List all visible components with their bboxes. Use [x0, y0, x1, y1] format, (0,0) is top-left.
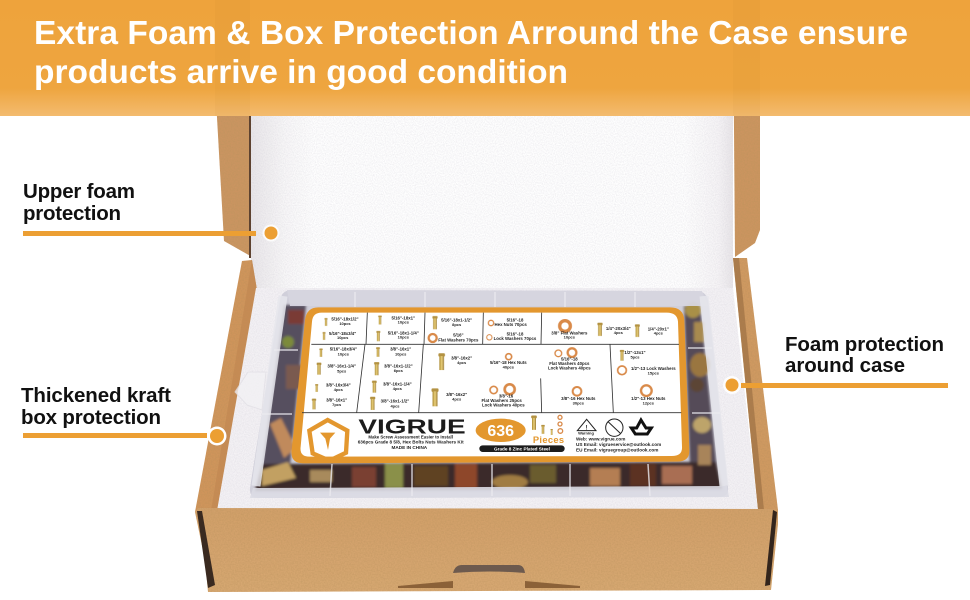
left corner shadow [197, 511, 215, 588]
size captions: 10pcs [398, 319, 410, 324]
size captions: 10pcs [338, 352, 350, 357]
size captions: 3/8"-16x1-1/2" [384, 363, 413, 368]
size captions: 10pcs [398, 335, 410, 340]
size captions: Flat Washers 25pcs [482, 398, 522, 403]
brand block: 636pcs Grade 8 5/8, Hex Bolts Nuts Washers Kit [358, 440, 464, 445]
callout: upper foam protection: Upper foam [23, 180, 135, 203]
logo hexagon [309, 420, 347, 461]
warning and contact block: Warning [578, 431, 594, 436]
size captions: 3/8"-16x1" [390, 347, 411, 352]
size captions: 3/8" Flat Washers [551, 331, 588, 336]
size captions: Flat Washers 40pcs [549, 361, 590, 366]
lid flaps ghosted through the band [215, 0, 760, 116]
front cardboard flap [195, 508, 778, 592]
warning and contact block: Web: www.vigrue.com [576, 437, 625, 442]
636 pieces badge: Pieces [533, 435, 564, 445]
size captions: 5/16" [453, 333, 464, 338]
size captions: 4pcs [654, 331, 664, 336]
size captions: 5/16"-18x1/2" [331, 317, 359, 322]
size captions: 15pcs [648, 371, 660, 376]
callout: upper foam protection: protection [23, 202, 121, 225]
right lid flap [733, 0, 760, 257]
upper lid flaps and foam [215, 0, 760, 288]
size captions: 1/4"-20x3/4" [606, 326, 631, 331]
size captions: 8pcs [452, 322, 462, 327]
upper foam pad [251, 0, 733, 288]
warning and contact block: ! [586, 425, 588, 431]
size captions: 4pcs [457, 360, 467, 365]
size captions: 3/8"-16x1" [326, 397, 347, 402]
size captions: 4pcs [614, 330, 624, 335]
callout: foam protection around case: around case [785, 354, 905, 377]
636 pieces badge [476, 415, 565, 452]
size captions: 5/16"-18x3/4" [330, 347, 357, 352]
brand block [309, 415, 466, 461]
right wall [733, 258, 778, 510]
title: Extra Foam & Box Protection Arround the Case ensure [34, 15, 908, 52]
size captions: Lock Washers 40pcs [482, 402, 525, 407]
translucent rim [287, 290, 708, 306]
size captions: 1/2"-13 Lock Washers [631, 366, 676, 371]
size captions: 3/8"-16x1-1/2" [381, 399, 409, 404]
size captions: 5/16"-18x3/4" [329, 331, 356, 336]
locking tab [453, 565, 525, 590]
size captions: 1/2"-13x1" [624, 350, 646, 355]
hinge clip [235, 372, 266, 410]
size captions: 30pcs [573, 401, 585, 406]
callout: foam protection around case: Foam protection [785, 333, 944, 356]
bottom foam tray [217, 288, 758, 511]
size captions: 4pcs [393, 386, 403, 391]
cardboard box side walls [195, 258, 778, 512]
size captions: 5pcs [337, 368, 347, 373]
size captions: 5/16"-18 [561, 357, 578, 362]
size captions: 1/2"-13 Hex Nuts [631, 396, 666, 401]
size captions: Lock Washers 70pcs [494, 336, 537, 341]
size captions: Flat Washers 70pcs [438, 337, 479, 342]
size captions: 10pcs [339, 321, 351, 326]
left lid flap [215, 0, 254, 258]
636 pieces badge: Grade 8 Zinc Plated Steel [494, 446, 550, 451]
brand block: Make Screw Assessment Easier to Install [368, 434, 453, 439]
size captions: 3/8"-16 [499, 393, 514, 398]
size captions: 3/8"-16x1-1/4" [383, 381, 412, 386]
label border [291, 307, 689, 463]
clear plastic case with hardware [235, 290, 729, 498]
grid lines [302, 313, 681, 413]
size captions: 5/16"-18x1" [392, 315, 415, 320]
locking tab slot [398, 581, 580, 588]
size captions: 6pcs [394, 368, 404, 373]
callout: thickened kraft box protection: Thickened kraft [21, 384, 171, 407]
size captions: 5/16"-18x1-1/4" [388, 331, 419, 336]
title [34, 15, 908, 91]
size captions: 12pcs [643, 401, 655, 406]
callout: thickened kraft box protection: box protection [21, 406, 161, 429]
size captions: 3/8"-16x2" [446, 392, 467, 397]
title: products arrive in good condition [34, 54, 568, 91]
brand name: VIGRUE [358, 415, 466, 438]
size captions: 10pcs [337, 335, 349, 340]
size captions: 40pcs [503, 365, 515, 370]
orange header band [0, 0, 970, 116]
size captions: 4pcs [334, 387, 344, 392]
size captions: 5/16"-18 [507, 317, 524, 322]
size captions: 4pcs [390, 403, 400, 408]
size captions: 5pcs [630, 355, 640, 360]
size captions: 3/8"-16x2" [451, 355, 472, 360]
size captions: 5/16"-18 Hex Nuts [490, 360, 527, 365]
size captions: 4pcs [452, 397, 462, 402]
size captions: 1/4"-20x1" [648, 327, 669, 332]
size captions: 3/8"-16x1-1/4" [327, 364, 356, 369]
warning and contact block [576, 419, 661, 452]
callout: upper foam protection [23, 180, 280, 242]
636 pieces badge: 636 [487, 423, 514, 440]
callout: foam protection around case [723, 333, 948, 394]
size captions: Hex Nuts 70pcs [495, 322, 527, 327]
label white panel [301, 313, 682, 457]
callout: thickened kraft box protection [21, 384, 226, 446]
size captions: 10pcs [395, 352, 407, 357]
right corner shadow [765, 510, 777, 586]
hardware visible in the compartments [255, 302, 722, 491]
product label [291, 307, 689, 463]
warning and contact block: EU Email: vigruegroup@outlook.com [576, 447, 658, 452]
size captions: 3/8"-16 Hex Nuts [561, 396, 596, 401]
size captions: 3/8"-16x3/4" [326, 382, 351, 387]
warning and contact block: US Email: vigrueservice@outlook.com [576, 442, 661, 447]
brand block: MADE IN CHINA [391, 445, 428, 450]
size captions: Lock Washers 40pcs [548, 365, 591, 370]
size captions: 7pcs [332, 402, 342, 407]
size captions: 5/16"-18x1-1/2" [441, 317, 472, 322]
bolt and washer pictograms [312, 315, 652, 410]
size captions: 10pcs [564, 335, 576, 340]
size captions [326, 315, 676, 408]
size captions: 5/16"-18 [507, 331, 524, 336]
case body [250, 290, 728, 498]
left wall [195, 260, 257, 512]
